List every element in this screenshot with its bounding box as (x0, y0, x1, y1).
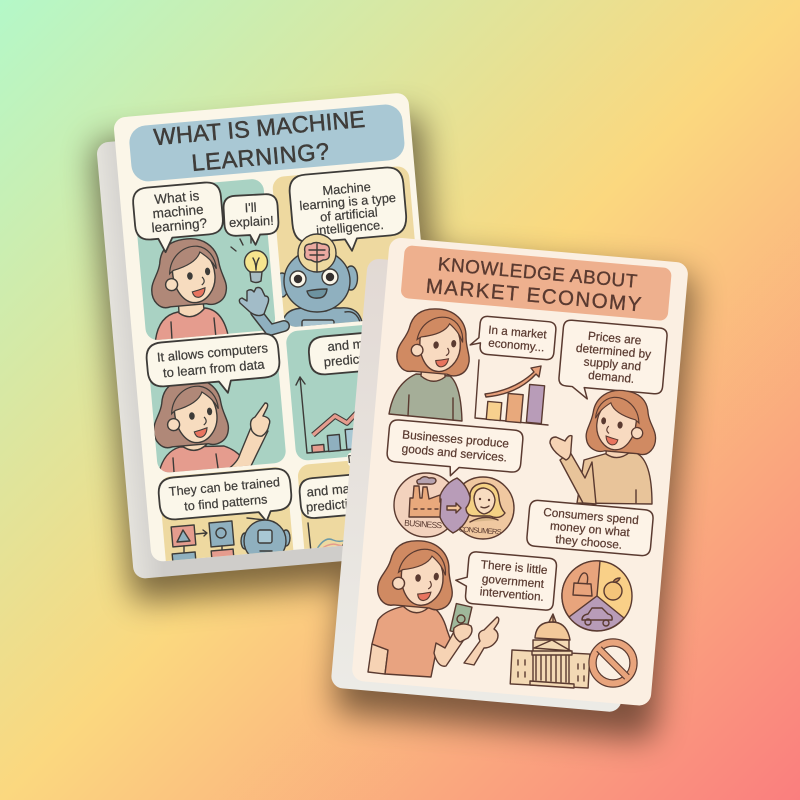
robot arm and hand (239, 288, 284, 330)
heading: knowledge about market economy: MARKET ECONOMY (425, 275, 642, 316)
speech bubble: they can be trained (158, 468, 292, 520)
speech bubble: and make predictions 2 (298, 474, 350, 519)
bar chart: data growth (295, 376, 355, 466)
character: girl gesturing (550, 388, 660, 504)
character: robot (280, 255, 362, 327)
speech bubble: machine learning is a type of AI: Machine (322, 179, 371, 198)
consumers circle (452, 477, 514, 539)
speech bubble: what is machine learning: learning? (151, 216, 208, 235)
speech bubble: and make predictions 2: and make (306, 480, 364, 500)
speech bubble: machine learning is a type of AI: intelligence. (316, 217, 384, 238)
diagram: business and consumers circles (394, 473, 514, 539)
back sheet left (96, 117, 433, 579)
speech bubble: machine learning is a type of AI (288, 166, 409, 256)
icon: government building (510, 614, 590, 688)
speech bubble: government intervention: government (481, 571, 545, 591)
speech bubble: prices: Prices are (587, 329, 642, 347)
character: girl asking (151, 238, 228, 340)
character: girl pointing (154, 383, 270, 472)
front sheet right (351, 237, 689, 706)
comic panels (132, 166, 415, 561)
heading: knowledge about market economy (400, 245, 672, 321)
flow arrow (447, 503, 461, 513)
speech bubble: I'll explain: explain! (229, 213, 274, 230)
speech bubble: and make predictions: predictions (323, 349, 388, 369)
speech bubble: it allows computers: It allows computers (156, 340, 269, 365)
speech bubble: businesses produce: goods and services. (401, 441, 508, 465)
speech bubble: they can be trained: to find patterns (184, 492, 268, 514)
speech bubble: I'll explain: I'll (244, 200, 257, 215)
icon: prohibited sign (592, 642, 634, 684)
icon: apple (604, 578, 622, 600)
speech bubble: in a market economy: In a market (488, 323, 548, 342)
speech bubble: what is machine learning: What is (154, 188, 200, 207)
banknote (450, 604, 472, 634)
speech bubble: it allows computers: to learn from data (162, 356, 266, 380)
icon: shopping bag (573, 573, 592, 596)
panel: what is machine learning card (96, 92, 447, 579)
icon: car (582, 608, 612, 626)
speech bubble: machine learning is a type of AI: of artificial (319, 204, 378, 224)
speech bubble: prices: determined by (575, 341, 652, 361)
heading: what is machine learning: LEARNING? (190, 138, 330, 176)
panel: knowledge about market economy card (330, 237, 689, 713)
speech bubble: consumers spend: money on what (549, 519, 631, 540)
panel: teal chart (286, 325, 362, 460)
character: girl with sage top (389, 306, 473, 421)
speech bubble: and make predictions (308, 332, 362, 376)
heading: knowledge about market economy: KNOWLEDGE ABOUT (437, 254, 638, 293)
panel: yellow predictions (298, 460, 350, 549)
consumer portrait (466, 483, 505, 522)
icon: light bulb (231, 237, 268, 282)
business circle (394, 473, 458, 537)
front sheet left (113, 92, 447, 562)
bar chart: data growth: Data (347, 452, 372, 466)
back sheet right (330, 258, 658, 713)
consumers label: CONSUMERS (458, 525, 502, 536)
speech bubble: consumers spend: they choose. (555, 532, 623, 552)
panel: teal intro (133, 178, 276, 341)
speech bubble: and make predictions: and make (327, 334, 385, 354)
panel: teal pointing (150, 370, 286, 472)
speech bubble: businesses produce (386, 419, 524, 482)
speech bubble: and make predictions 2: predictions (305, 494, 370, 515)
speech bubble: government intervention: intervention. (479, 584, 544, 604)
icon: robot brain (298, 234, 336, 272)
speech bubble: it allows computers (145, 332, 282, 400)
diagram: pattern shapes (170, 520, 235, 560)
speech bubble: in a market economy: economy... (488, 337, 545, 354)
panel: yellow patterns (162, 467, 294, 561)
speech bubble: prices: demand. (588, 368, 635, 386)
overlap (438, 478, 471, 533)
pointing hand (464, 617, 499, 665)
speech bubble: businesses produce: Businesses produce (402, 427, 510, 451)
line chart: predictions (307, 522, 344, 548)
factory icon (409, 486, 441, 517)
speech bubble: I'll explain (223, 194, 280, 246)
speech bubble: prices: supply and (583, 354, 642, 373)
pie chart: spending (562, 561, 632, 631)
speech bubble: consumers spend: Consumers spend (543, 505, 639, 527)
speech bubble: what is machine learning (132, 181, 225, 255)
speech bubble: government intervention (454, 550, 557, 611)
bar chart: rising market (475, 360, 548, 425)
arm (434, 628, 465, 666)
panel: yellow robot (272, 165, 421, 328)
heading: what is machine learning (128, 103, 406, 183)
speech bubble: government intervention: There is little (480, 557, 549, 577)
speech bubble: what is machine learning: machine (152, 202, 204, 221)
speech bubble: they can be trained: They can be trained (168, 475, 280, 499)
speech bubble: consumers spend (526, 500, 654, 556)
business label: BUSINESS (404, 518, 443, 530)
speech bubble: machine learning is a type of AI: learning is a type (299, 190, 397, 213)
icon: small robot (240, 517, 291, 554)
heading: what is machine learning: WHAT IS MACHINE (153, 106, 366, 150)
character: girl with money (368, 538, 499, 677)
speech bubble: in a market economy (470, 315, 557, 360)
speech bubble: prices (557, 320, 668, 405)
